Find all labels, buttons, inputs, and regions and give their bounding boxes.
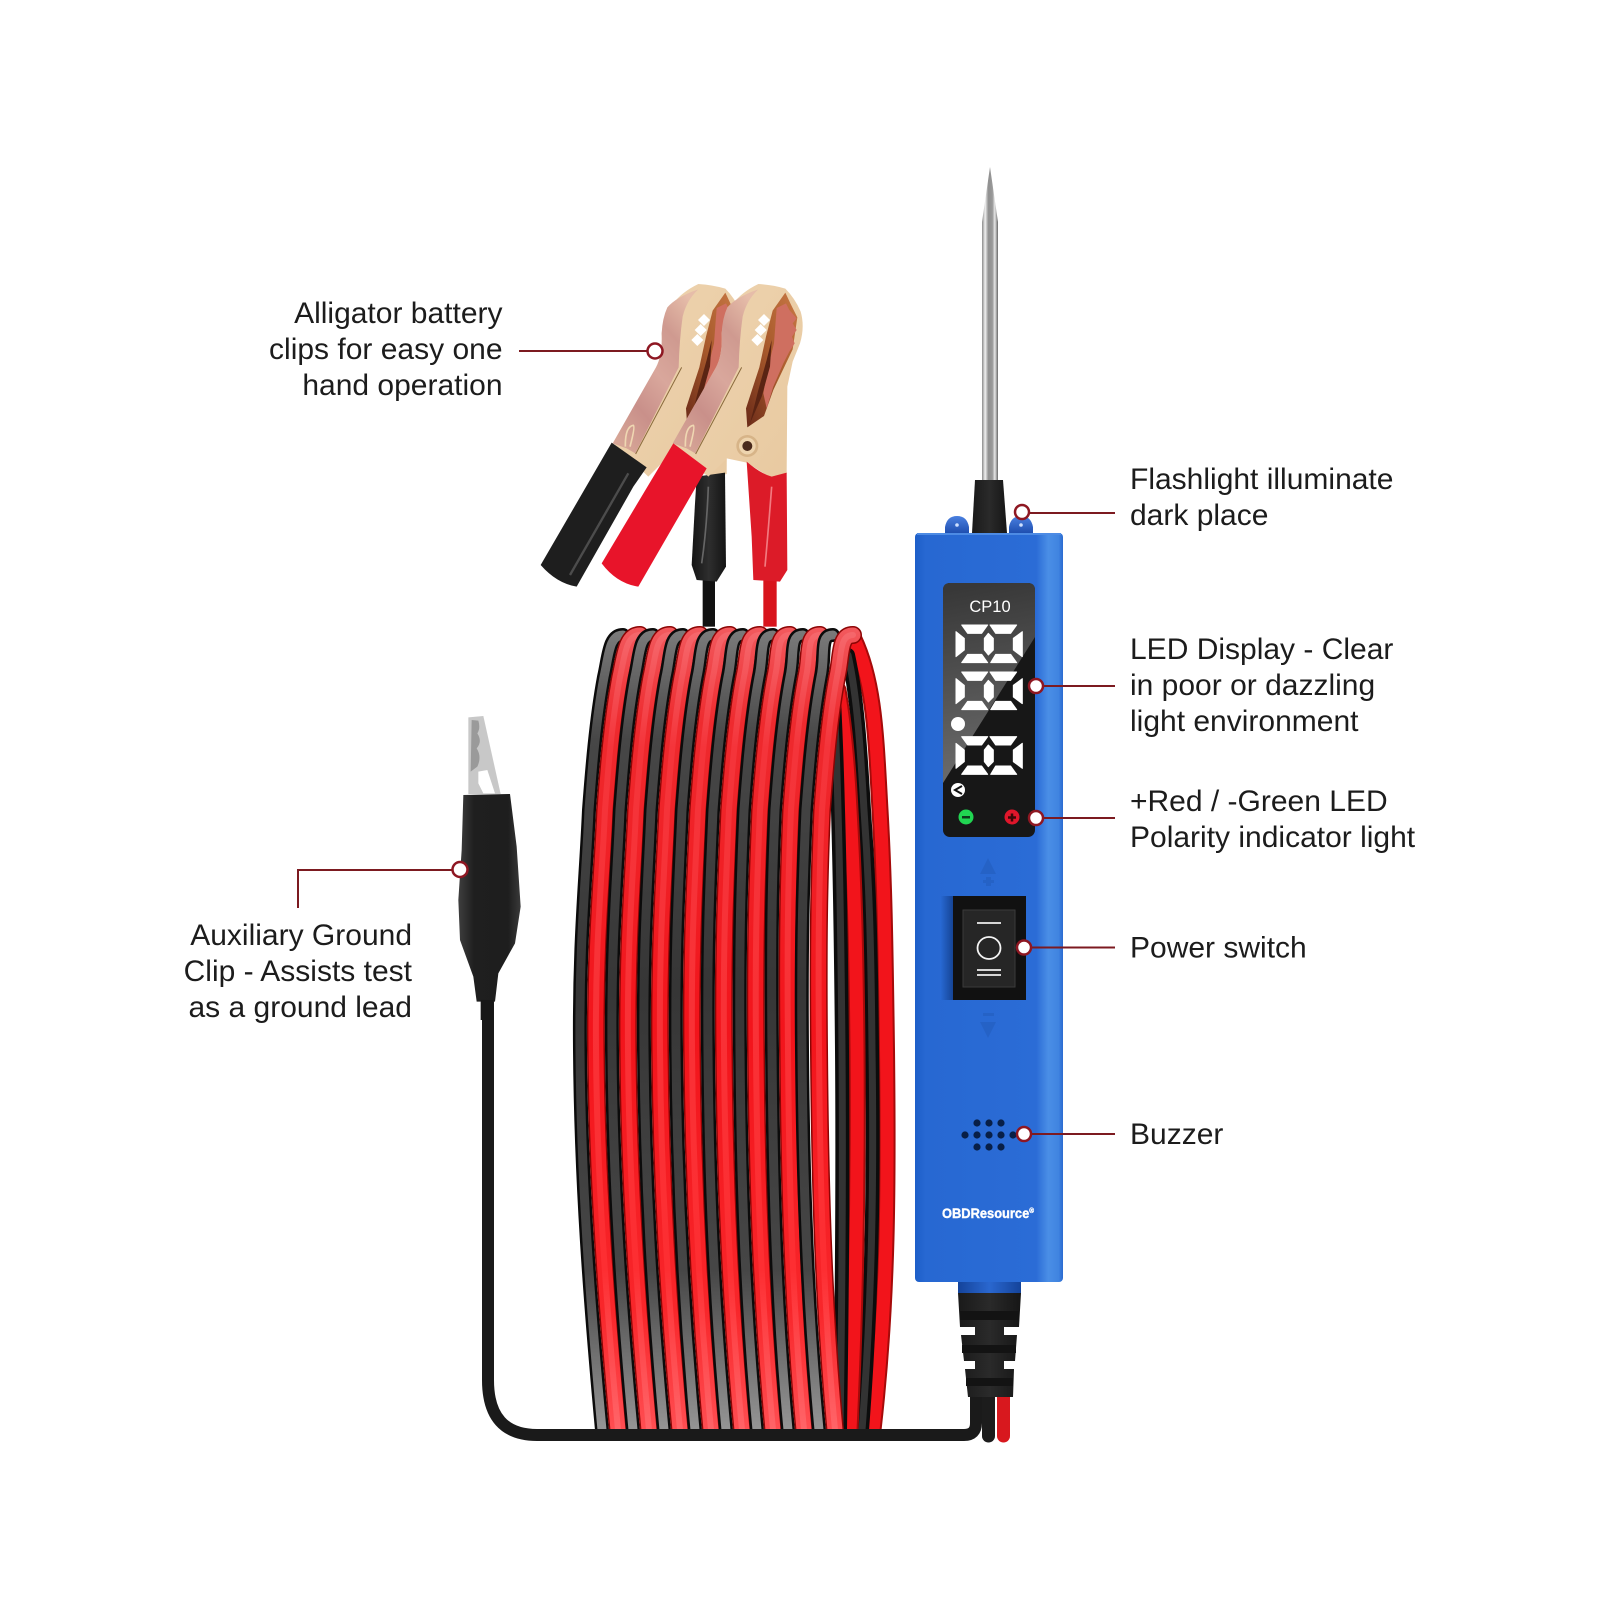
cable coil bbox=[580, 635, 887, 1430]
wires above coil bbox=[703, 580, 777, 627]
callout: auxiliary ground clip: Auxiliary Ground bbox=[190, 919, 412, 952]
callout: LED display: light environment bbox=[1130, 705, 1359, 738]
black nose cone bbox=[972, 480, 1007, 533]
callout: alligator clips bbox=[269, 297, 662, 402]
flashlight LEDs bbox=[945, 516, 1033, 533]
callout: polarity light: +Red / -Green LED bbox=[1130, 785, 1388, 818]
callout: flashlight: Flashlight illuminate bbox=[1130, 463, 1393, 496]
front windings of the coil bbox=[580, 635, 853, 1430]
metal jaw bbox=[468, 716, 501, 794]
black clip bbox=[541, 284, 743, 587]
callout: alligator clips: Alligator battery bbox=[294, 297, 502, 330]
callout: power switch: Power switch bbox=[1130, 932, 1307, 964]
callout: LED display bbox=[1029, 633, 1393, 738]
brand logo: OBDResource bbox=[942, 1205, 1037, 1221]
callout: LED display: LED Display - Clear bbox=[1130, 633, 1393, 666]
red plus light bbox=[1004, 810, 1020, 824]
callout: polarity light bbox=[1029, 785, 1416, 854]
power switch bbox=[941, 896, 1026, 1000]
tester body bbox=[915, 533, 1063, 1282]
up and down arrows bbox=[980, 858, 996, 1038]
callout: auxiliary ground clip bbox=[184, 862, 468, 1024]
callout: auxiliary ground clip: Clip - Assists test bbox=[184, 955, 413, 988]
callout: power switch bbox=[1017, 932, 1307, 964]
green minus light bbox=[958, 810, 974, 824]
callout: LED display: in poor or dazzling bbox=[1130, 669, 1375, 702]
volt icon bbox=[951, 783, 965, 797]
probe tip bbox=[972, 167, 1007, 533]
alligator battery clips bbox=[541, 284, 803, 627]
seven segment digits bbox=[956, 625, 1022, 774]
buzzer holes bbox=[961, 1119, 1017, 1151]
brand logo: ® bbox=[1029, 1207, 1035, 1215]
callout: buzzer bbox=[1017, 1118, 1223, 1151]
back loops of the coil bbox=[834, 635, 887, 1430]
callout: alligator clips: hand operation bbox=[302, 369, 502, 402]
callout: flashlight: dark place bbox=[1130, 499, 1268, 532]
auxiliary ground clip bbox=[458, 716, 521, 1020]
red clip bbox=[602, 284, 803, 587]
callout: buzzer: Buzzer bbox=[1130, 1118, 1223, 1151]
callout: flashlight bbox=[1015, 463, 1393, 532]
strain relief boot and wires bbox=[958, 1282, 1021, 1442]
indicator dot bbox=[951, 717, 965, 731]
callout: polarity light: Polarity indicator light bbox=[1130, 821, 1416, 854]
black sleeve bbox=[458, 794, 521, 1002]
auxiliary ground wire bbox=[488, 1000, 976, 1435]
LED display bbox=[943, 583, 1035, 837]
callout: auxiliary ground clip: as a ground lead bbox=[188, 991, 412, 1024]
model name: CP10 bbox=[969, 598, 1011, 616]
callout: alligator clips: clips for easy one bbox=[269, 333, 502, 366]
